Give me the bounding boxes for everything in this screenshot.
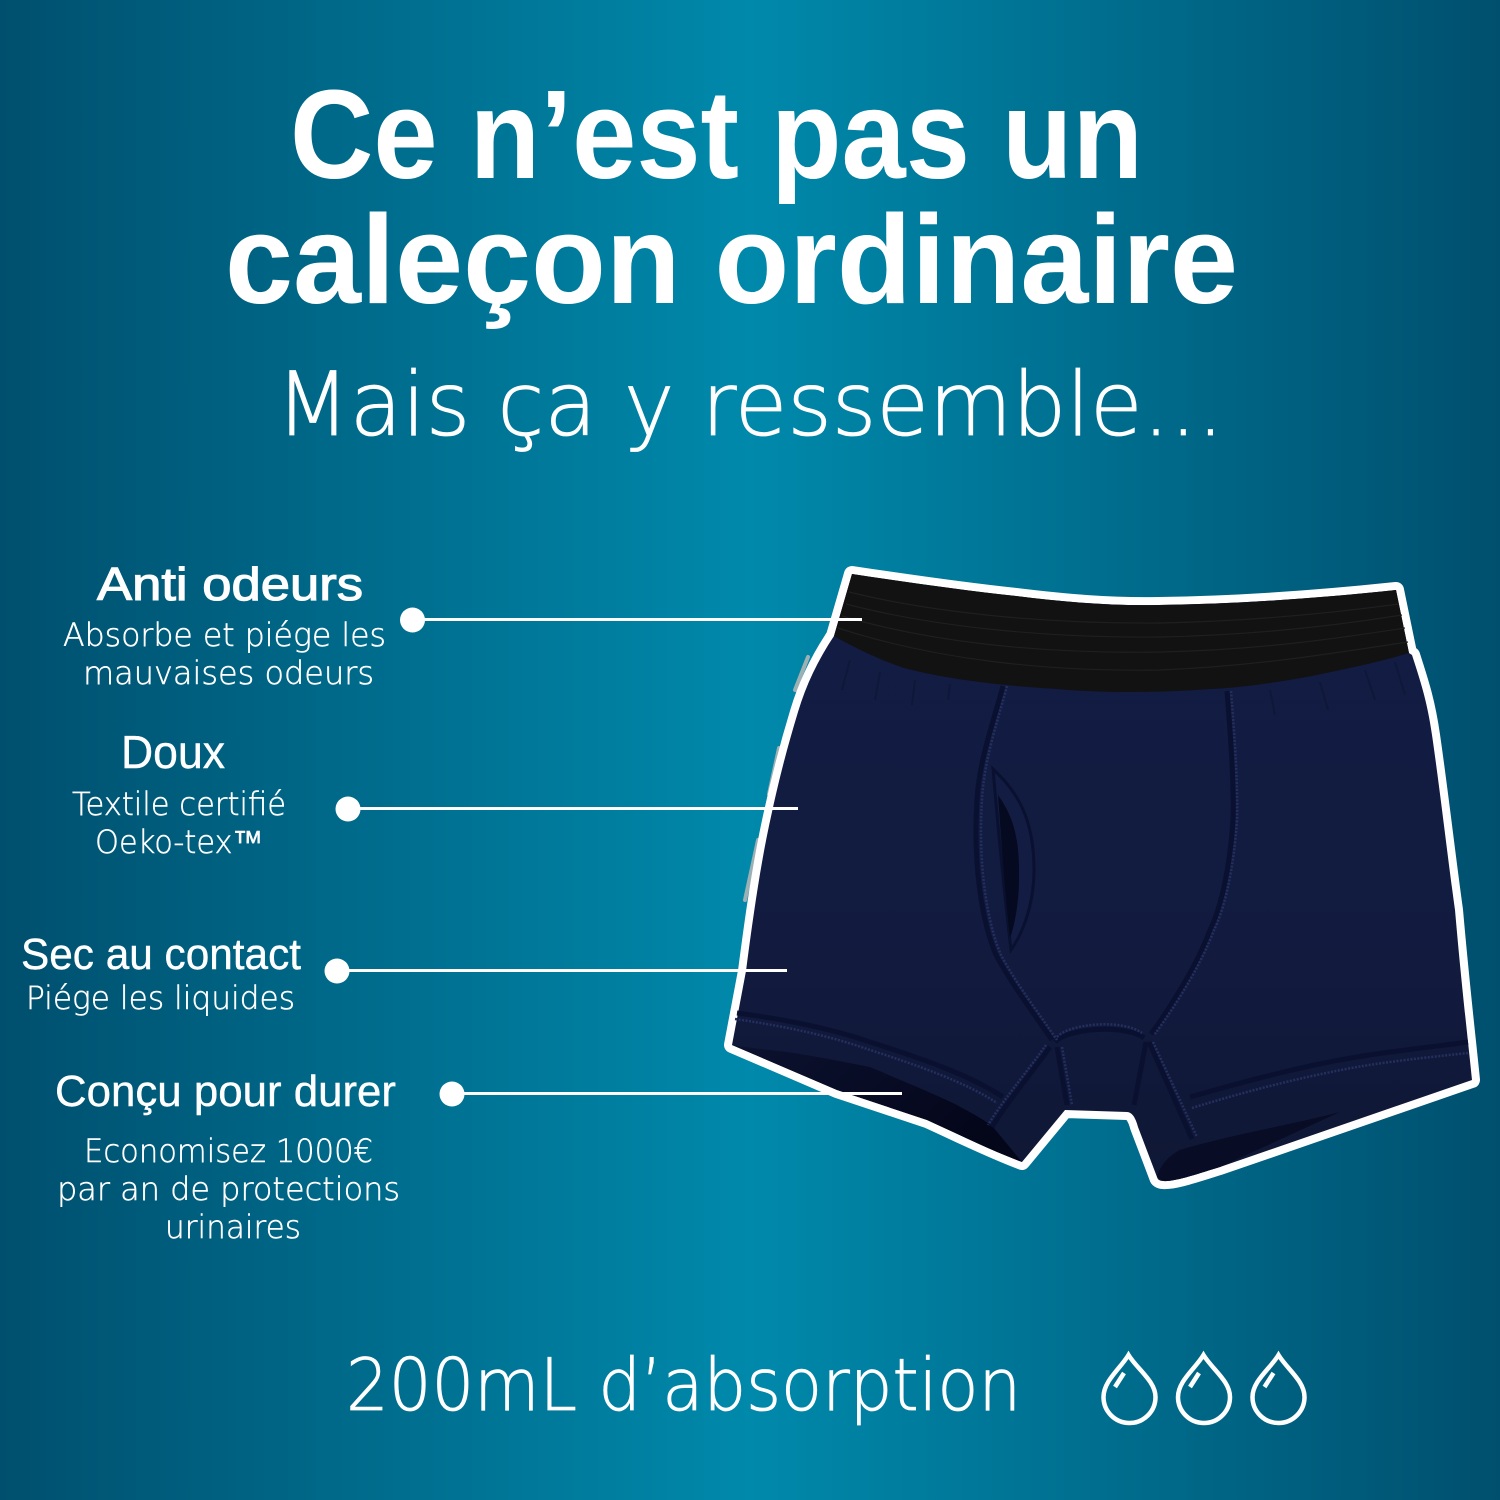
- feature: Anti odeurs: Absorbe et piége les: [63, 616, 386, 654]
- feature: Doux: Doux: [121, 726, 225, 778]
- feature: Sec au contact: [21, 930, 301, 1017]
- feature: Sec au contact: Piége les liquides: [26, 979, 295, 1017]
- feature: Doux: Oeko-tex™: [95, 823, 263, 861]
- icon: water drops: [1104, 1355, 1304, 1423]
- title: Ce n’est pas un: [290, 64, 1143, 205]
- feature: Doux: [72, 726, 286, 861]
- title: [225, 64, 1238, 330]
- feature: Conçu pour durer: Economisez 1000€: [84, 1132, 373, 1170]
- feature: Sec au contact: Sec au contact: [21, 930, 301, 979]
- right leg interior shading: [1157, 1112, 1340, 1181]
- product: boxer briefs with white outline: [732, 574, 1472, 1181]
- icon: drop 2: [1178, 1355, 1230, 1423]
- shadow slivers: [745, 657, 808, 900]
- fabric gathers under waistband: [842, 660, 1405, 715]
- feature: Conçu pour durer: urinaires: [165, 1208, 301, 1246]
- icon: drop 3: [1252, 1355, 1304, 1423]
- feature: Anti odeurs: mauvaises odeurs: [83, 654, 374, 692]
- callout line: Anti odeurs: [400, 608, 862, 632]
- feature: Anti odeurs: [63, 558, 386, 692]
- callout line: Conçu pour durer: [440, 1082, 902, 1106]
- feature: Conçu pour durer: [55, 1067, 400, 1246]
- feature: Doux: Textile certifié: [72, 785, 286, 823]
- waistband: [834, 574, 1409, 692]
- callout line: Sec au contact: [324, 958, 787, 984]
- waistband ribs: [838, 592, 1408, 670]
- feature: Anti odeurs: Anti odeurs: [97, 558, 363, 610]
- title: caleçon ordinaire: [225, 189, 1238, 330]
- subtitle: Mais ça y ressemble...: [276, 353, 1224, 456]
- absorption label: 200mL d’absorption: [346, 1343, 1021, 1427]
- icon: drop 1: [1104, 1355, 1156, 1423]
- seams: dark lines: [737, 686, 1468, 1139]
- feature: Conçu pour durer: Conçu pour durer: [55, 1067, 396, 1116]
- seams: stitching: [735, 686, 1468, 1137]
- fly opening: [993, 769, 1034, 950]
- feature: Conçu pour durer: par an de protections: [57, 1170, 400, 1208]
- left leg interior shading: [732, 1045, 1022, 1162]
- callout line: Doux: [336, 796, 798, 822]
- white outline and garment body: [732, 574, 1472, 1181]
